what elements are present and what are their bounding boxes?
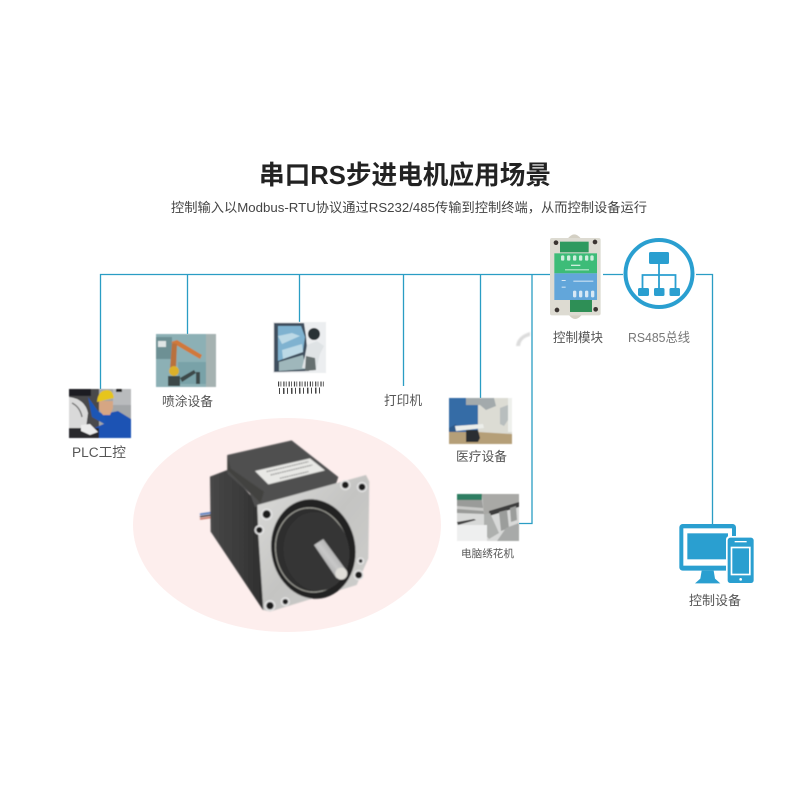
photo: spray coating robot <box>156 334 216 387</box>
panel: pink ellipse behind motor <box>133 418 441 632</box>
monitor <box>679 524 736 571</box>
label: 医疗设备: 医疗设备 <box>456 449 507 464</box>
module green panel <box>554 253 597 273</box>
label: 电脑绣花机: 电脑绣花机 <box>461 547 515 560</box>
label: 打印机: 打印机 <box>384 393 422 408</box>
motor body side <box>210 470 265 610</box>
phone <box>726 536 755 585</box>
subtitle: 控制输入以Modbus-RTU协议通过RS232/485传输到控制终端，从而控制设备运行 <box>171 200 647 215</box>
bus connection lines <box>100 274 712 525</box>
icon: RS485 bus network <box>626 240 692 307</box>
motor <box>200 440 369 612</box>
module blue panel <box>554 273 597 300</box>
motor front plate <box>257 475 369 612</box>
label: RS485总线: RS485总线 <box>628 330 690 345</box>
label: PLC工控: PLC工控 <box>72 445 127 460</box>
module casing <box>550 238 601 315</box>
motor body top <box>227 440 338 507</box>
photo: embroidery machine <box>457 494 519 541</box>
motor shaft <box>314 539 345 578</box>
motor bolts <box>255 481 366 610</box>
motor round face <box>263 492 363 606</box>
motor nameplate <box>255 458 325 484</box>
label: 控制模块: 控制模块 <box>553 330 603 345</box>
module screws <box>554 240 598 312</box>
control module <box>550 234 601 319</box>
illegible caption marks <box>278 384 325 391</box>
title: 串口RS步进电机应用场景 <box>259 160 551 190</box>
smudge near module <box>516 332 530 346</box>
module bottom terminal <box>570 300 592 312</box>
photo: medical equipment room <box>449 398 512 444</box>
label: 喷涂设备: 喷涂设备 <box>162 394 213 409</box>
motor cable <box>200 512 214 519</box>
icon: control devices <box>679 524 755 585</box>
module mounting tabs <box>568 234 582 319</box>
label: 控制设备: 控制设备 <box>689 593 741 608</box>
module top terminal <box>560 242 589 252</box>
photo: PLC industrial control worker <box>69 389 131 438</box>
photo: operator at touchscreen <box>273 322 326 373</box>
